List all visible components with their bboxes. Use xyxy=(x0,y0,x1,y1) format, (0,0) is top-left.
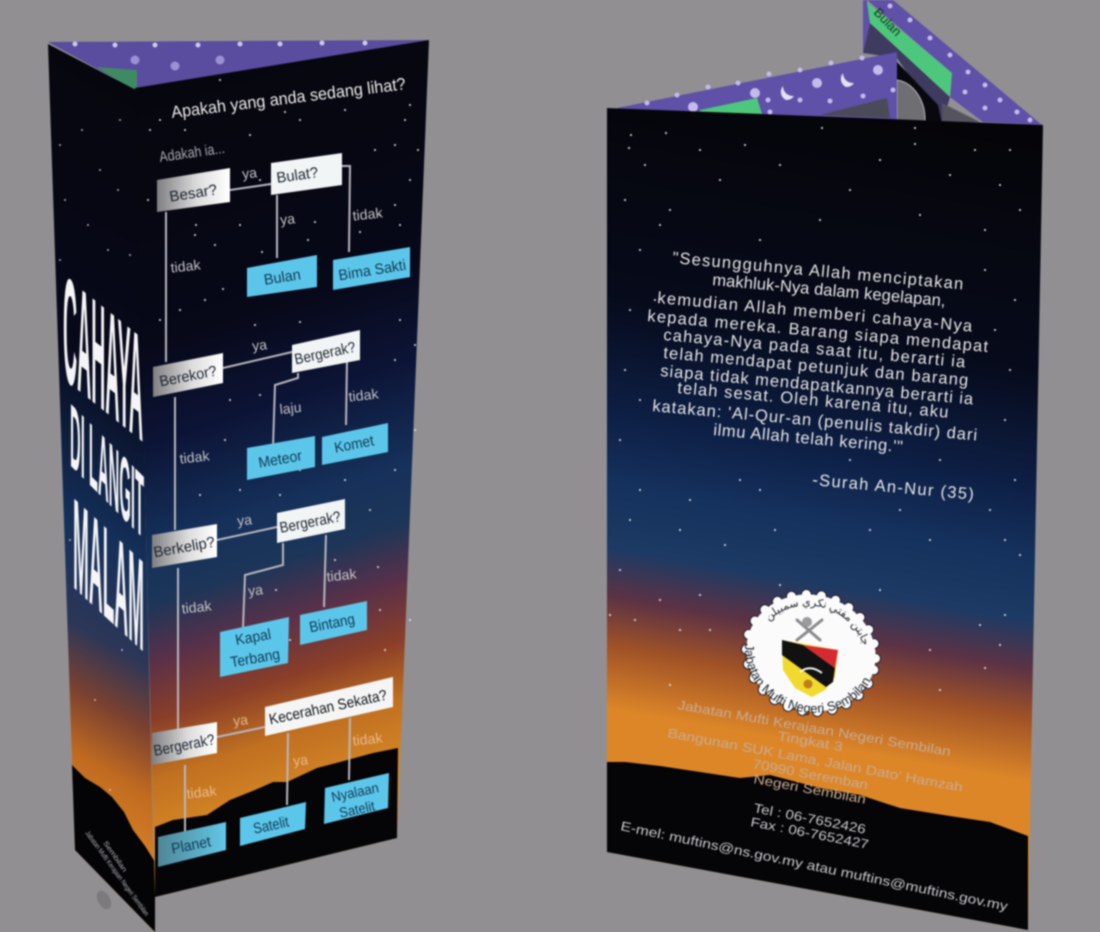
flow answer labels: ya xyxy=(247,581,264,599)
flow step: Besar: Besar? xyxy=(168,181,218,206)
result: Komet: Komet xyxy=(333,432,376,457)
flow step: Bergerak (3) xyxy=(152,722,217,765)
flow answer labels: ya xyxy=(241,164,258,182)
address block: Tingkat 3 xyxy=(776,728,844,754)
logo: Jabatan Mufti Negeri Sembilan crest xyxy=(740,588,882,718)
flow step: Bergerak (1): Bergerak? xyxy=(293,339,357,368)
telephone and fax: Fax : 06-7652427 xyxy=(749,814,870,852)
quranic verse text: "Sesungguhnya Allah menciptakan xyxy=(672,249,964,293)
result: Nyalaan Satelit: Satelit xyxy=(338,798,376,821)
result: Nyalaan Satelit: Nyalaan xyxy=(330,779,380,805)
flow answer labels: ya xyxy=(232,711,249,729)
flow step: Berekor xyxy=(153,353,223,397)
result: Kapal Terbang: Kapal xyxy=(234,626,272,649)
quranic verse text xyxy=(647,249,989,456)
rear purple flap with green tab: Bulan xyxy=(871,5,905,39)
result: Satelit: Satelit xyxy=(252,813,291,838)
spine small print: Sembilan xyxy=(101,840,128,874)
front panel sky xyxy=(135,40,429,897)
shadow smudge under leaflet xyxy=(94,888,114,912)
spine title: Cahaya di Langit Malam xyxy=(63,242,144,680)
flow answer labels: tidak xyxy=(181,597,213,617)
quranic verse text: makhluk-Nya dalam kegelapan, xyxy=(712,271,946,310)
flow answer labels: tidak xyxy=(326,565,358,585)
rear purple flap with green tab xyxy=(863,0,1042,125)
address block xyxy=(666,697,964,807)
flow answer labels: ya xyxy=(251,336,268,354)
scalloped badge face xyxy=(733,580,889,726)
flow answer labels: ya xyxy=(292,751,309,769)
flow answer labels: ya xyxy=(279,210,296,228)
quranic verse text: katakan: 'Al-Qur-an (penulis takdir) dari xyxy=(652,397,978,445)
telephone and fax: Tel : 06-7652426 xyxy=(752,800,867,837)
flow answer labels xyxy=(170,164,384,802)
front purple flap with stars and moons xyxy=(617,52,897,120)
result: Kapal Terbang: Terbang xyxy=(229,646,281,671)
quranic verse text: siapa tidak mendapatkannya berarti ia xyxy=(660,362,975,409)
address block: Bangunan SUK Lama, Jalan Dato' Hamzah xyxy=(666,725,964,795)
quranic verse text: cahaya-Nya pada saat itu, berarti ia xyxy=(663,326,967,372)
badge upper lettering: جابتن مفتي نكري سمبيلن xyxy=(768,598,868,646)
flow step: Berkelip: Berkelip? xyxy=(152,534,216,561)
inner dark pocket xyxy=(890,62,942,124)
front panel mountain silhouette xyxy=(155,748,398,897)
result: Bintang xyxy=(300,601,367,645)
flow answer labels: ya xyxy=(236,511,253,529)
result: Komet xyxy=(322,423,388,465)
flow step: Bergerak (3): Bergerak? xyxy=(152,731,216,760)
result: Planet: Planet xyxy=(170,833,213,858)
flow step: Bulat xyxy=(271,153,342,195)
brochure: right standing leaflet xyxy=(606,0,1044,931)
flow answer labels: tidak xyxy=(179,447,211,467)
result: Bima Sakti xyxy=(333,247,410,290)
back panel stars xyxy=(610,128,1020,690)
result: Bintang: Bintang xyxy=(308,611,356,636)
address block: Jabatan Mufti Kerajaan Negeri Sembilan xyxy=(676,697,952,759)
quranic verse text: kemudian Allah memberi cahaya-Nya xyxy=(657,289,974,336)
brochure: left standing leaflet: DI LANGIT xyxy=(70,384,144,559)
flow step: Bergerak (2): Bergerak? xyxy=(278,508,342,537)
flow step: Bergerak (2) xyxy=(277,499,345,543)
spine stars xyxy=(60,120,130,790)
flow answer labels: tidak xyxy=(186,782,218,802)
flow step: Besar xyxy=(157,168,230,212)
flow step: Kecerahan Sekata: Kecerahan Sekata? xyxy=(268,687,389,728)
verse citation: -Surah An-Nur (35) xyxy=(812,471,975,504)
shield xyxy=(782,640,838,697)
result: Bulan xyxy=(247,255,317,297)
badge lower lettering: Jabatan Mufti Negeri Sembilan xyxy=(744,643,872,716)
back panel mountain silhouette xyxy=(607,762,1028,930)
result: Planet xyxy=(158,822,226,867)
result: Bulan: Bulan xyxy=(263,266,302,289)
spine mountain silhouette xyxy=(72,765,155,932)
result: Kapal Terbang xyxy=(220,617,289,677)
scalloped badge outline xyxy=(733,580,889,726)
telephone and fax xyxy=(749,800,870,852)
result: Satelit xyxy=(240,802,306,846)
quranic verse text: telah sesat. Oleh karena itu, aku xyxy=(677,379,949,422)
front panel stars xyxy=(148,80,418,650)
result: Bima Sakti: Bima Sakti xyxy=(337,257,407,284)
result: Meteor: Meteor xyxy=(257,447,303,472)
result: Nyalaan Satelit xyxy=(324,773,389,824)
e-mail line: E-mel: muftins@ns.gov.my atau muftins@muftins.gov.my xyxy=(619,818,1010,914)
moon card peeking out xyxy=(897,80,925,122)
brochure: left standing leaflet: CAHAYA xyxy=(63,242,143,474)
question heading: Apakah yang anda sedang lihat? xyxy=(170,74,407,122)
flow answer labels: laju xyxy=(279,399,302,417)
flow answer labels: tidak xyxy=(352,204,384,224)
address block: Negeri Sembilan xyxy=(752,771,867,807)
flow answer labels: tidak xyxy=(352,729,384,749)
flowchart connector lines xyxy=(166,166,350,832)
flow answer labels: tidak xyxy=(170,256,202,276)
sub heading: Adakah ia... xyxy=(158,140,226,166)
flow step: Berekor: Berekor? xyxy=(158,363,218,390)
address block: 70990 Seremban xyxy=(751,756,869,792)
quranic verse text: kepada mereka. Barang siapa mendapat xyxy=(647,307,989,356)
flow step: Berkelip xyxy=(152,524,217,568)
flow step: Bulat: Bulat? xyxy=(275,164,319,187)
brochure: left standing leaflet xyxy=(48,40,429,932)
back panel sky xyxy=(607,108,1043,930)
grey card behind pocket xyxy=(942,103,980,124)
result: Meteor xyxy=(247,436,315,480)
flow step: Bergerak (1) xyxy=(292,330,360,373)
quranic verse text: telah mendapat petunjuk dan barang xyxy=(663,344,969,390)
inner purple flap with stars xyxy=(48,40,429,93)
flow answer labels: tidak xyxy=(348,385,380,405)
spine panel xyxy=(48,44,155,932)
quranic verse text: ilmu Allah telah kering.'" xyxy=(713,421,904,456)
crossed swords xyxy=(797,617,822,640)
